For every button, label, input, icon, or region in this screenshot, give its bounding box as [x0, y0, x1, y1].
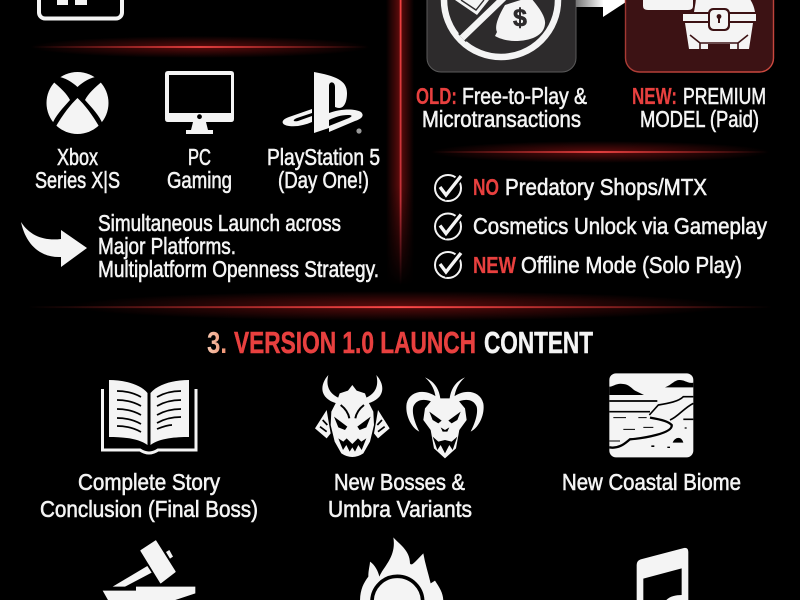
heading: version 1.0 launch content: 3.	[207, 325, 227, 360]
icon: PC monitor	[165, 71, 234, 134]
label: old model: Free-to-Play &	[462, 83, 587, 109]
heading: version 1.0 launch content: VERSION 1.0 LAUNCH	[234, 325, 476, 360]
label: PC: PC	[188, 144, 211, 170]
icon: coastal landscape	[609, 373, 693, 457]
label: PC	[167, 144, 232, 193]
icon: anvil and hammer	[103, 541, 195, 600]
label: PlayStation 5: (Day One!)	[278, 167, 369, 193]
arrow: curved white arrow	[21, 222, 87, 267]
panel: launch content	[40, 325, 741, 600]
icon: partial console box	[39, 0, 122, 18]
list item: offline mode: NEW	[473, 252, 517, 278]
icon: prohibition sign	[444, 0, 558, 57]
icon: ram demon	[406, 377, 484, 458]
icon: flame ring	[360, 537, 443, 600]
icon: music note	[637, 548, 688, 600]
list item: offline mode	[435, 252, 742, 278]
panel: business model	[416, 0, 774, 278]
divider: section 3	[28, 291, 772, 321]
label: PlayStation 5	[267, 144, 380, 193]
text: simultaneous launch	[98, 210, 379, 282]
label: complete story: Conclusion (Final Boss)	[40, 496, 258, 522]
label: new model: MODEL (Paid)	[640, 106, 759, 132]
heading: version 1.0 launch content: CONTENT	[484, 325, 593, 360]
label: old model: Microtransactions	[422, 106, 581, 132]
icon: money bag: $	[513, 4, 527, 32]
icon: treasure chest	[643, 0, 756, 49]
icon: ticket	[455, 0, 489, 15]
icon: PlayStation logo	[283, 72, 363, 134]
label: complete story	[40, 469, 258, 522]
icon: open book	[102, 380, 196, 453]
label: Xbox: Series X|S	[35, 167, 120, 193]
list item: no predatory shops: Predatory Shops/MTX	[505, 174, 707, 200]
divider: platforms	[30, 36, 370, 58]
label: Xbox	[35, 144, 120, 193]
text: simultaneous launch: Simultaneous Launch across	[98, 210, 341, 236]
panel: platforms	[21, 0, 380, 282]
text: simultaneous launch: Major Platforms.	[98, 233, 236, 259]
label: new bosses: Umbra Variants	[328, 496, 472, 522]
label: PC: Gaming	[167, 167, 232, 193]
label: new model	[632, 83, 766, 132]
list item: offline mode: Offline Mode (Solo Play)	[521, 252, 742, 278]
label: old model	[416, 83, 587, 132]
card: old model	[427, 0, 576, 72]
vertical section divider	[386, 0, 414, 285]
label: new coastal biome: New Coastal Biome	[562, 469, 741, 495]
list item: no predatory shops	[435, 174, 707, 201]
label: new bosses	[328, 469, 472, 522]
label: Xbox: Xbox	[57, 144, 98, 170]
label: old model: OLD:	[416, 83, 457, 109]
icon: Xbox logo	[46, 72, 108, 134]
text: simultaneous launch: Multiplatform Openness Strategy.	[98, 256, 379, 282]
divider: model	[430, 141, 770, 163]
list item: no predatory shops: NO	[473, 174, 499, 200]
label: new bosses: New Bosses &	[334, 469, 465, 495]
label: new model: NEW:	[632, 83, 677, 109]
card: new model	[626, 0, 774, 72]
icon: money bag	[495, 0, 545, 41]
icon: horned demon	[315, 375, 390, 457]
label: PlayStation 5: PlayStation 5	[267, 144, 380, 170]
icon: demon masks	[315, 375, 484, 458]
label: complete story: Complete Story	[78, 469, 220, 495]
arrow: old to new	[576, 0, 629, 17]
label: new model: PREMIUM	[683, 83, 766, 109]
